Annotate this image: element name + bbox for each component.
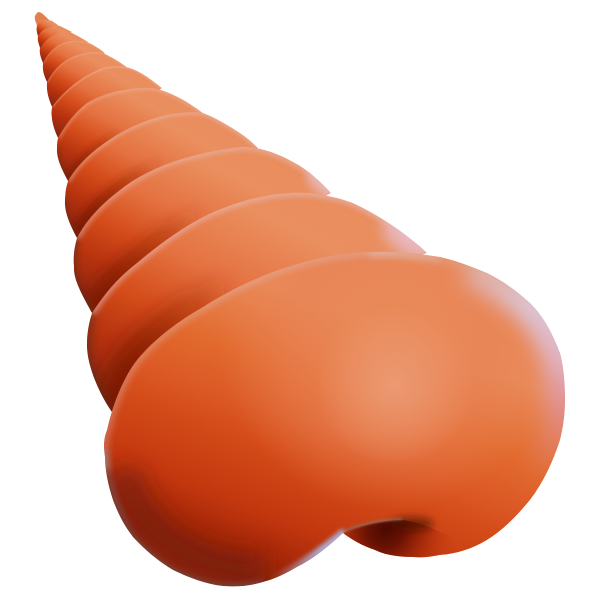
highlight: central sheen (330, 328, 456, 454)
rim: grey notch edge (345, 519, 402, 531)
shadow: lower-left band (122, 470, 265, 570)
whorl: C (65, 112, 258, 238)
whorl: A (87, 193, 434, 430)
rim: lilac tip of whorl A (374, 219, 426, 254)
rim: pale upper-left edge (104, 252, 440, 470)
whorls: apex (35, 12, 88, 63)
whorl: main body (104, 252, 565, 586)
rim: blue-lilac sliver near notch (262, 532, 345, 584)
underside: lobe below notch (343, 520, 448, 558)
whorl: F (47, 52, 128, 107)
shadow: notch core fade (390, 517, 434, 531)
rim: grey lower-left edge (105, 450, 263, 586)
whorl: B (74, 147, 343, 313)
whorl: D (57, 88, 203, 181)
whorl: E (51, 66, 162, 138)
highlight: broad glow (246, 252, 523, 494)
rim: top right fading edge (368, 252, 474, 270)
rim: lilac tip of whorl B (302, 171, 330, 196)
rim: lilac right edge (470, 264, 565, 500)
whorl: G (43, 41, 105, 82)
